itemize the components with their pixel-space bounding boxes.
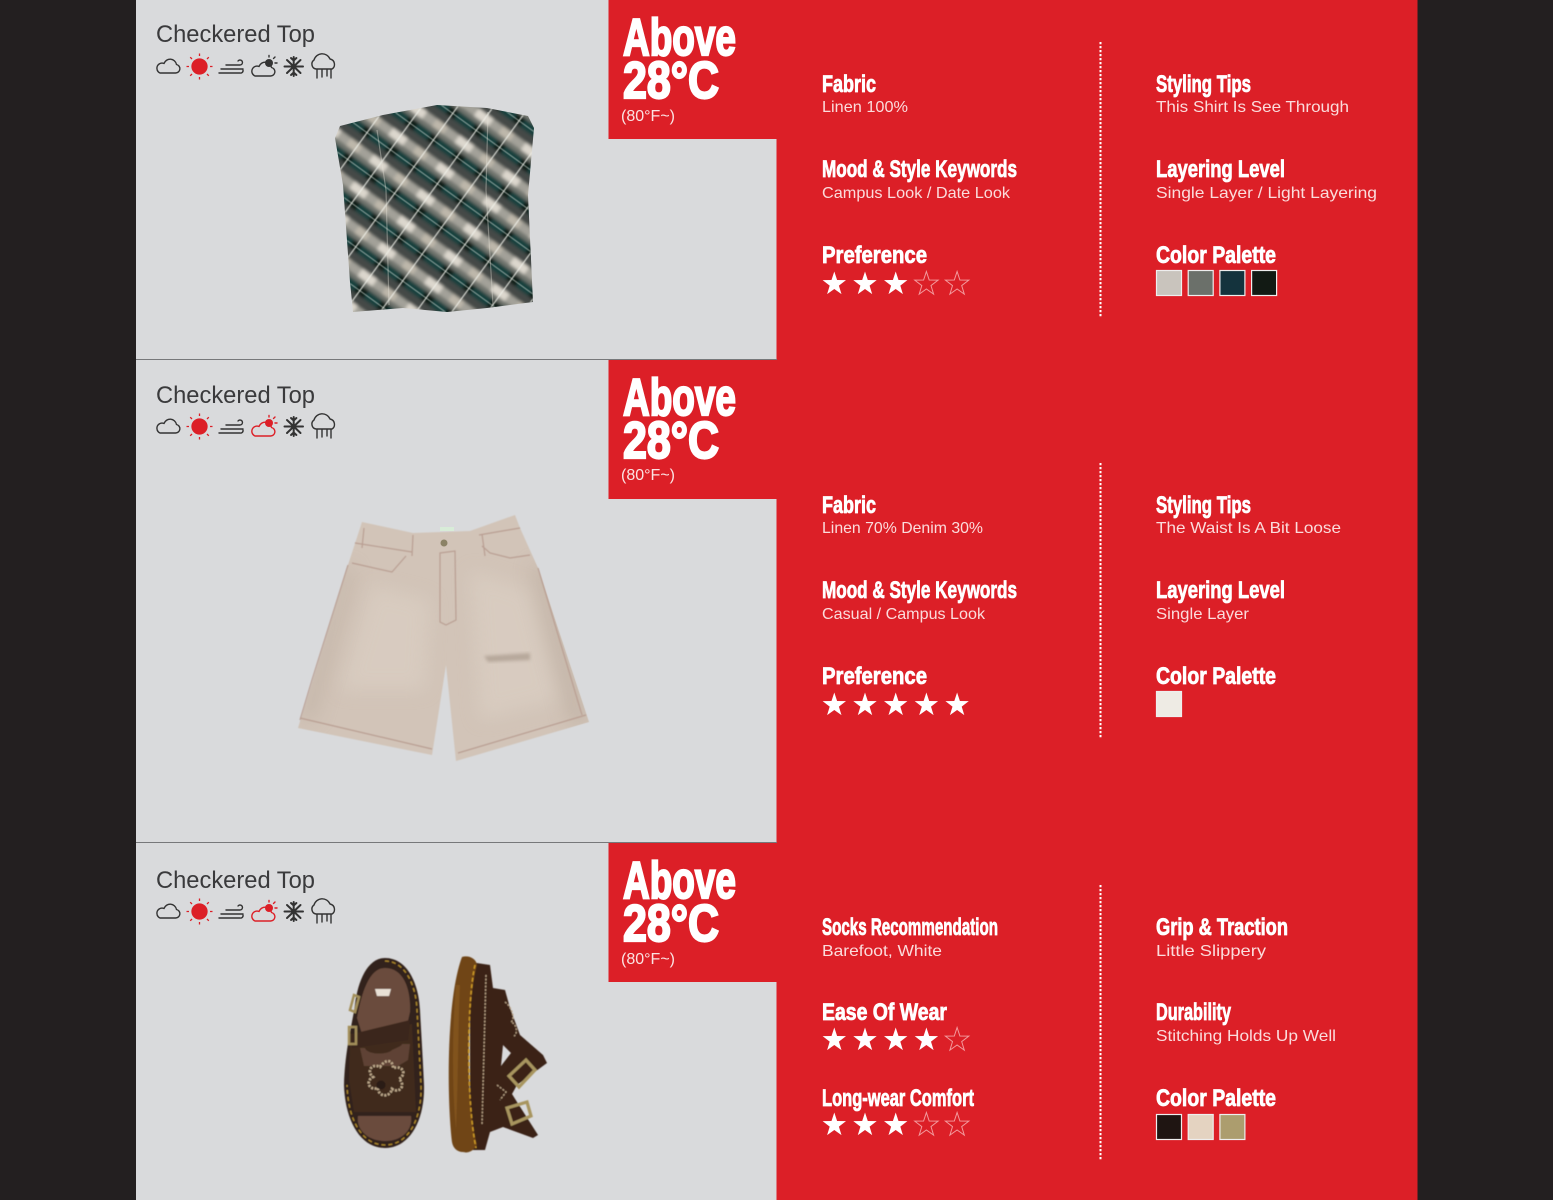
field: layering level: Single Layer / Light Layering [1156, 185, 1377, 202]
field: socks: Barefoot, White [822, 943, 942, 960]
field: preference rating [822, 242, 969, 294]
field: color palette: Color Palette [1156, 242, 1276, 269]
field: ease of wear rating [822, 999, 969, 1050]
temperature tab: Above [623, 9, 736, 67]
field: styling tips [1156, 71, 1349, 116]
field: fabric: Linen 100% [822, 99, 908, 116]
field: preference rating [822, 663, 969, 715]
temperature tab: 28°C [623, 52, 719, 110]
temperature tab: (80°F~) [621, 108, 675, 125]
field: mood and style: Mood & Style Keywords [822, 156, 1017, 183]
field: color palette [1156, 242, 1277, 296]
field: comfort rating: Long-wear Comfort [822, 1085, 974, 1112]
field: ease of wear rating: Ease Of Wear [822, 999, 947, 1026]
temperature tab: 28°C [623, 412, 719, 470]
temperature tab: 28°C [623, 895, 719, 953]
panel: sandals card [136, 842, 1418, 1200]
field: color palette [1156, 1085, 1276, 1140]
field: styling tips [1156, 492, 1341, 537]
garment: plaid top [335, 105, 534, 312]
field: color palette [1156, 663, 1276, 716]
panel: top garment card [136, 0, 1418, 360]
field: layering level: Layering Level [1156, 156, 1285, 183]
field: fabric [822, 492, 983, 537]
field: fabric: Fabric [822, 71, 876, 98]
field: socks: Socks Recommendation [822, 914, 998, 941]
field: fabric: Fabric [822, 492, 876, 519]
right sandal [449, 956, 547, 1152]
field: color palette: Color Palette [1156, 663, 1276, 690]
field: preference rating: Preference [822, 242, 927, 269]
field: grip: Grip & Traction [1156, 914, 1288, 941]
weather icons [157, 898, 334, 924]
divider: dotted [1100, 885, 1102, 1161]
left sandal [344, 958, 424, 1148]
field: durability [1156, 999, 1336, 1045]
field: layering level: Single Layer [1156, 606, 1250, 623]
garment title: Checkered Top [156, 382, 315, 409]
field: styling tips: The Waist Is A Bit Loose [1156, 520, 1341, 537]
temperature tab [608, 0, 778, 139]
temperature tab: (80°F~) [621, 951, 675, 968]
temperature tab: (80°F~) [621, 467, 675, 484]
field: fabric [822, 71, 908, 116]
temperature tab [608, 360, 778, 499]
field: mood and style: Mood & Style Keywords [822, 577, 1017, 604]
field: color palette: Color Palette [1156, 1085, 1276, 1112]
field: fabric: Linen 70% Denim 30% [822, 520, 983, 537]
field: durability: Stitching Holds Up Well [1156, 1028, 1336, 1045]
field: mood and style [822, 577, 1017, 623]
temperature tab: Above [623, 369, 736, 427]
field: layering level: Layering Level [1156, 577, 1285, 604]
temperature tab: Above [623, 852, 736, 910]
weather icons [157, 54, 334, 80]
weather icons [157, 414, 334, 440]
field: styling tips: Styling Tips [1156, 492, 1251, 519]
field: preference rating: Preference [822, 663, 927, 690]
field: socks [822, 914, 998, 960]
field: mood and style [822, 156, 1017, 202]
garment: brown sandals [344, 956, 547, 1152]
garment title: Checkered Top [156, 21, 315, 48]
divider: dotted [1100, 463, 1102, 739]
panel: shorts card [136, 359, 1418, 843]
field: layering level [1156, 577, 1285, 623]
field: styling tips: This Shirt Is See Through [1156, 99, 1349, 116]
field: styling tips: Styling Tips [1156, 71, 1251, 98]
field: grip [1156, 914, 1288, 960]
field: grip: Little Slippery [1156, 943, 1266, 960]
garment title: Checkered Top [156, 867, 315, 894]
field: durability: Durability [1156, 999, 1231, 1026]
garment: denim shorts [298, 515, 590, 761]
field: comfort rating [822, 1085, 974, 1135]
field: layering level [1156, 156, 1377, 202]
field: mood and style: Casual / Campus Look [822, 606, 986, 623]
temperature tab [608, 843, 778, 982]
divider: dotted [1100, 42, 1102, 318]
field: mood and style: Campus Look / Date Look [822, 185, 1011, 202]
